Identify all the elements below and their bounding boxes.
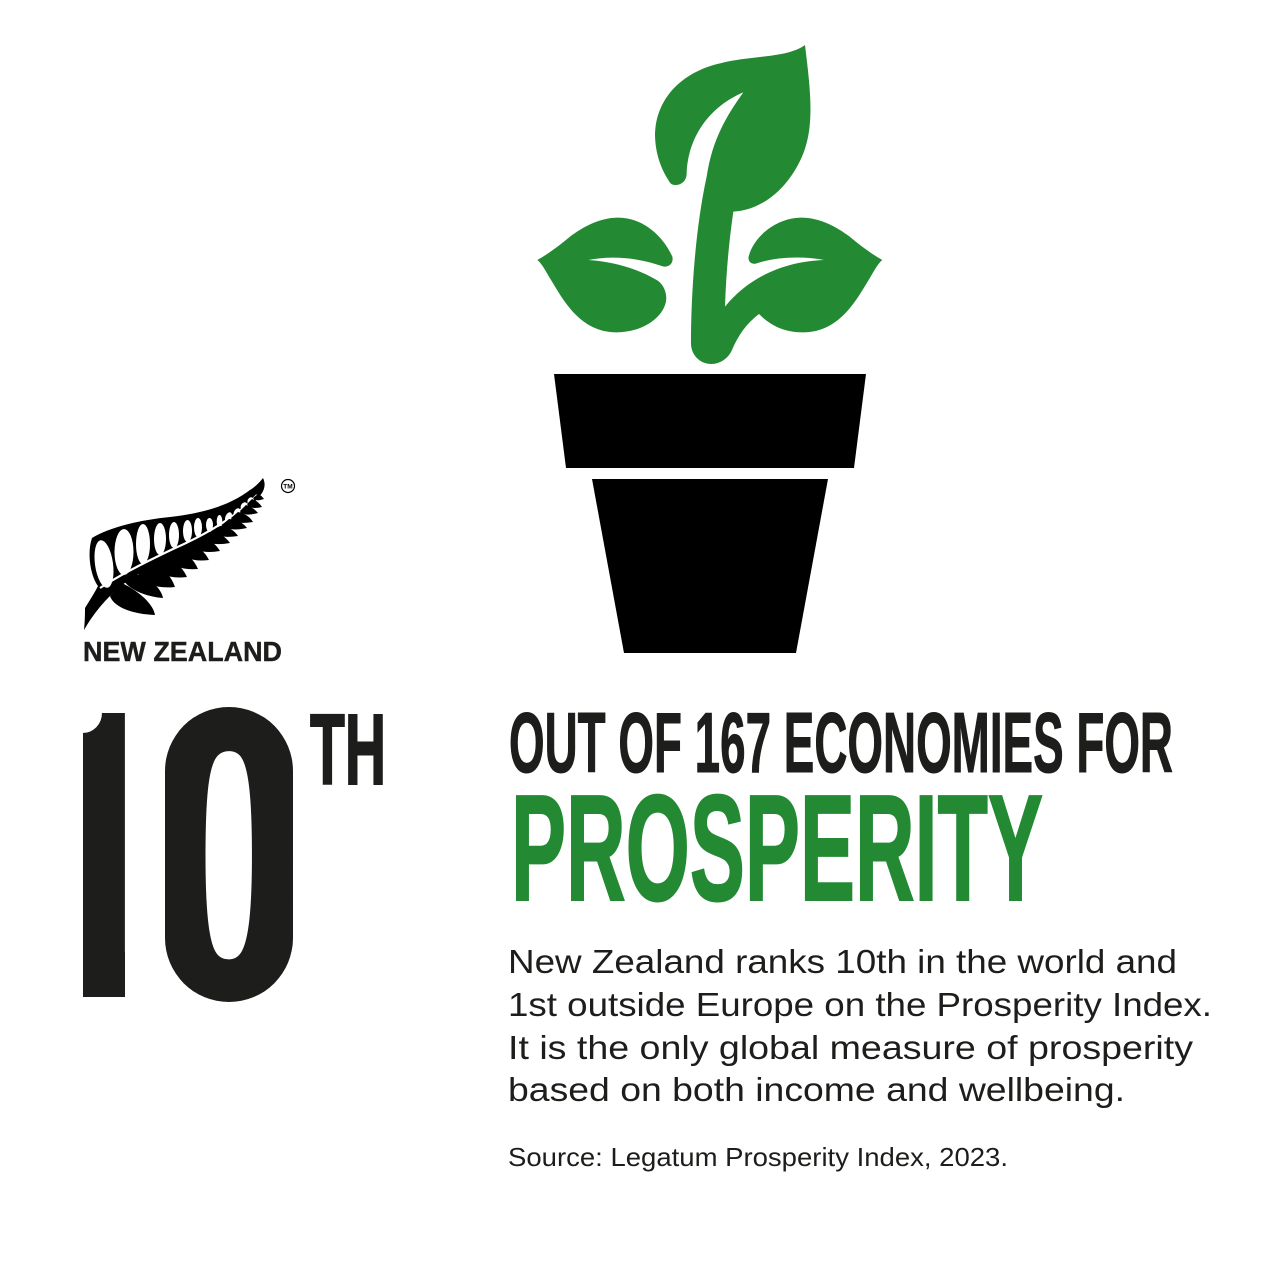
icon: trademark: TM: [283, 484, 293, 490]
logo wordmark: NEW ZEALAND: [83, 636, 282, 667]
big rank number: 1: [6, 621, 181, 1085]
body text: New Zealand ranks 10th in the world and: [508, 943, 1177, 980]
body text: It is the only global measure of prosperity: [508, 1029, 1194, 1066]
icon: green seedling: [537, 45, 882, 364]
logo: silver fern with New Zealand wordmark: [83, 478, 294, 667]
big rank number: 0: [151, 601, 307, 1109]
heading: [509, 696, 1173, 932]
body text: [508, 943, 1212, 1108]
big rank number: [83, 707, 383, 1002]
icon: black plant pot: [554, 374, 866, 653]
body text: 1st outside Europe on the Prosperity Index.: [508, 986, 1212, 1023]
icon: fern: [84, 478, 265, 630]
ordinal suffix: TH: [310, 694, 386, 806]
icon: trademark: [282, 480, 294, 492]
body text: based on both income and wellbeing.: [508, 1071, 1125, 1108]
source note: Source: Legatum Prosperity Index, 2023.: [508, 1142, 1008, 1172]
